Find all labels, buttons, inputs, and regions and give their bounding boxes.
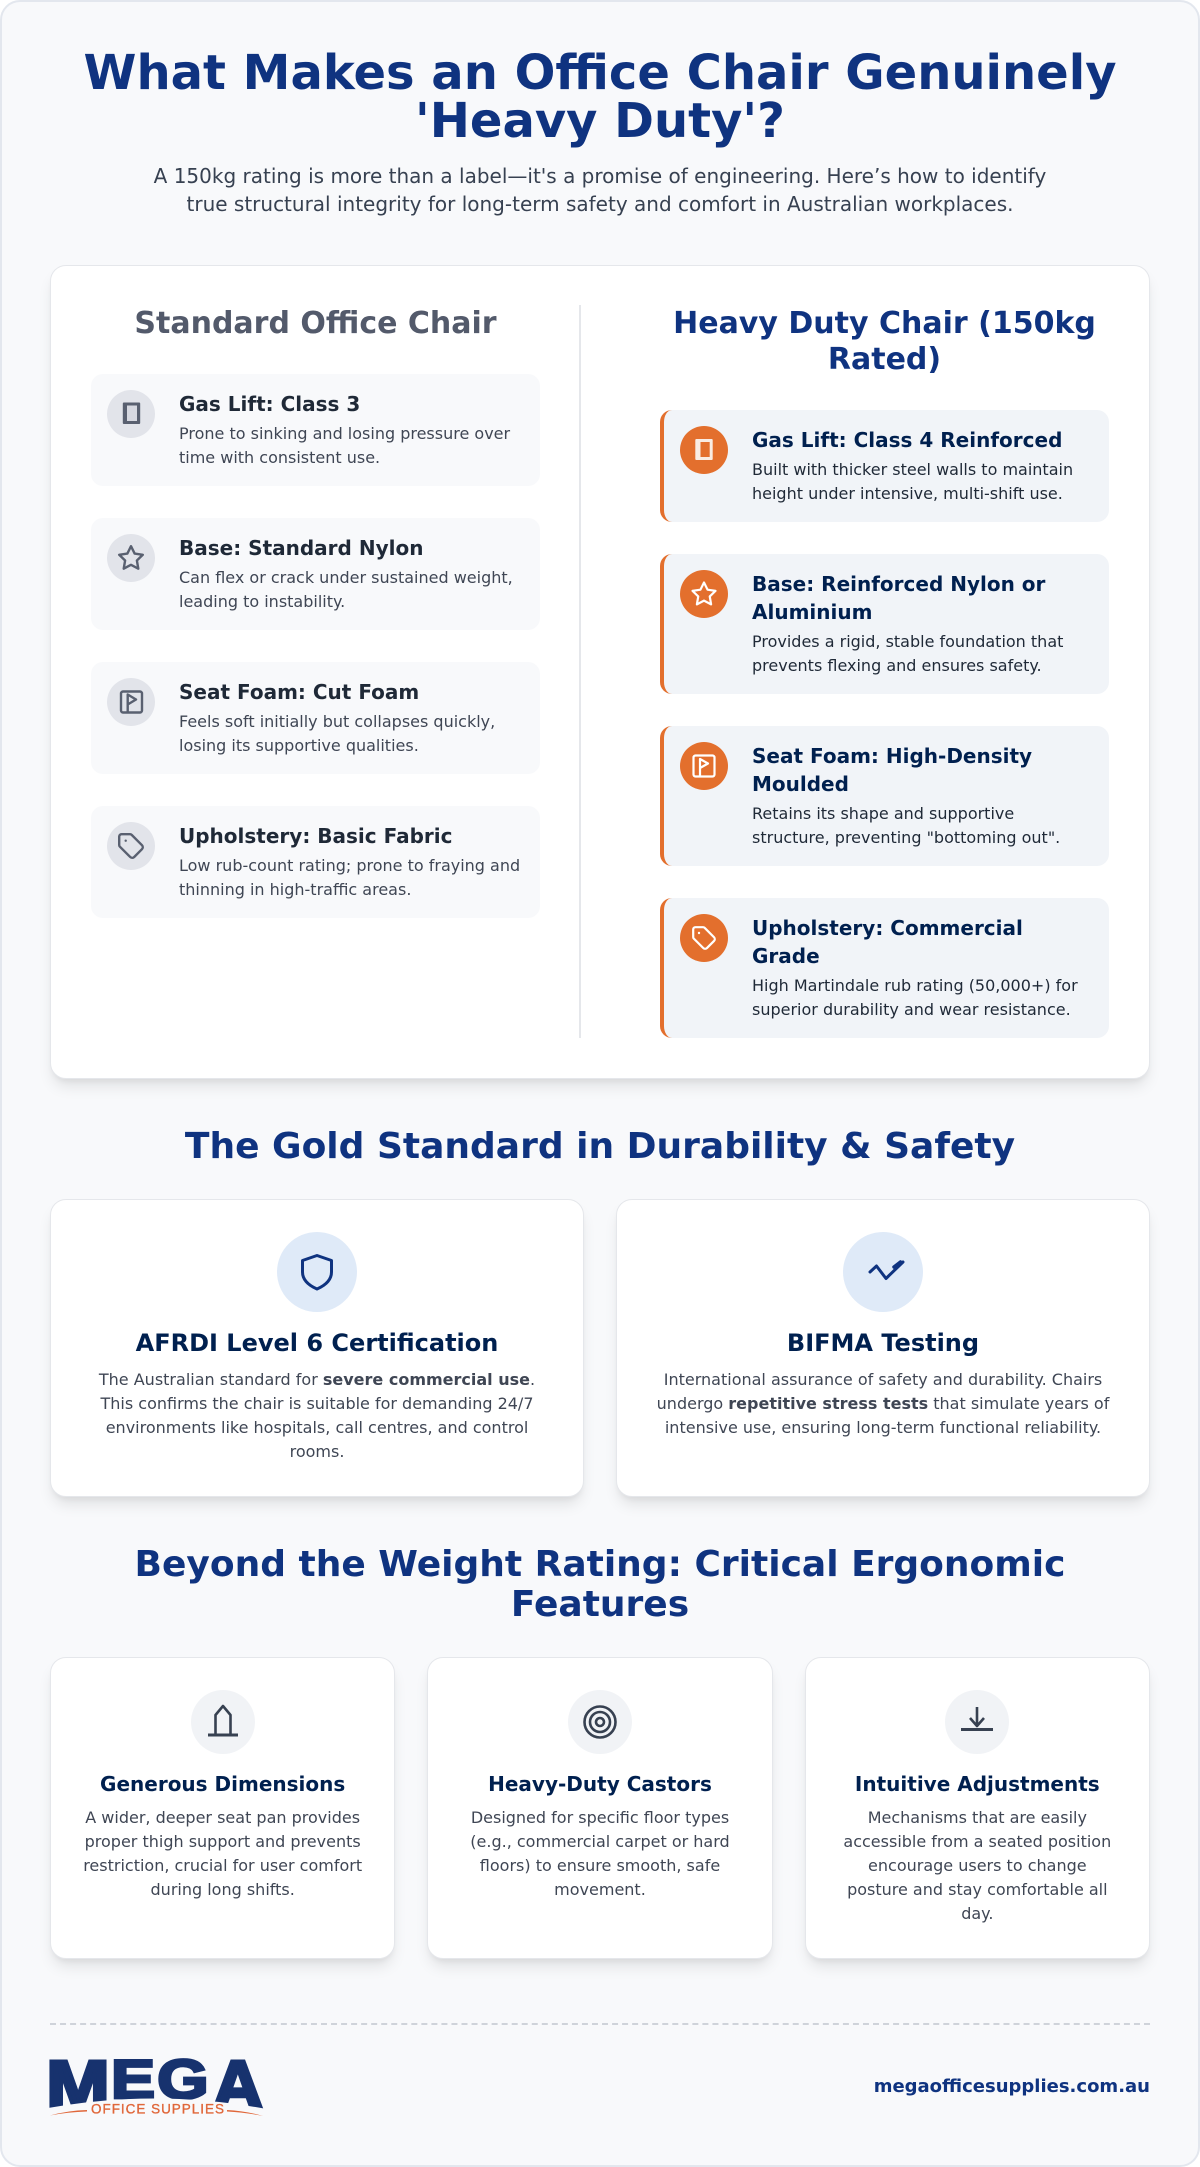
text: class 4 reinforced <box>752 428 1073 503</box>
icon: gas cylinder <box>680 426 728 474</box>
heading: dimensions: Generous Dimensions <box>100 1772 345 1796</box>
heavy duty item: base <box>660 554 1109 694</box>
heading: adjustments: Intuitive Adjustments <box>855 1772 1100 1796</box>
heading: heavy duty chair: Heavy Duty Chair (150kg <box>673 306 1096 341</box>
heading: heavy duty chair: Rated) <box>828 342 941 377</box>
text: adjustments description: accessible from a seated position <box>843 1832 1111 1851</box>
text: high-density moulded <box>752 744 1060 847</box>
icon: target <box>568 1690 632 1754</box>
text: high-density moulded: Moulded <box>752 772 849 796</box>
text: BIFMA description: intensive use, ensuring long-term functional reliability. <box>665 1418 1101 1437</box>
text: adjustments description: Mechanisms that are easily <box>868 1808 1087 1827</box>
text: reinforced nylon or aluminium: Aluminium <box>752 600 872 624</box>
text: dimensions description: during long shifts. <box>151 1880 295 1899</box>
panel: generous dimensions <box>50 1657 395 1959</box>
text: basic fabric: Low rub-count rating; prone to fraying and <box>179 856 520 875</box>
text: basic fabric <box>179 824 520 899</box>
panel: intuitive adjustments <box>805 1657 1150 1959</box>
heavy duty item: upholstery <box>660 898 1109 1038</box>
title <box>84 45 1116 149</box>
heading: standard office chair: Standard Office Chair <box>134 306 497 341</box>
text: adjustments description <box>843 1808 1111 1923</box>
text: adjustments description: day. <box>961 1904 993 1923</box>
website url: megaofficesupplies.com.au <box>874 2076 1150 2097</box>
text: adjustments description: posture and stay comfortable all <box>847 1880 1108 1899</box>
heading: heavy duty chair <box>673 306 1096 377</box>
text: gas lift class 3 <box>179 392 510 467</box>
subtitle text <box>154 164 1046 216</box>
text: dimensions description: proper thigh support and prevents <box>85 1832 361 1851</box>
subtitle text: true structural integrity for long-term safety and comfort in Australian workplaces. <box>186 192 1013 216</box>
heading: critical ergonomic features: Beyond the Weight Rating: Critical Ergonomic <box>135 1544 1065 1585</box>
icon: download arrow <box>945 1690 1009 1754</box>
text: gas lift class 3: Gas Lift: Class 3 <box>179 392 360 416</box>
text: AFRDI description: rooms. <box>290 1442 344 1461</box>
text: reinforced nylon or aluminium: Provides a rigid, stable foundation that <box>752 632 1063 651</box>
text: standard nylon <box>179 536 513 611</box>
text: class 4 reinforced: Built with thicker steel walls to maintain <box>752 460 1073 479</box>
logo: Mega Office Supplies <box>46 2046 264 2124</box>
text: castors description <box>470 1808 730 1899</box>
panel: heavy-duty castors <box>427 1657 773 1959</box>
text: BIFMA description: undergo repetitive stress tests that simulate years of <box>657 1394 1109 1413</box>
icon: star <box>107 534 155 582</box>
text: dimensions description: restriction, crucial for user comfort <box>83 1856 362 1875</box>
text: reinforced nylon or aluminium <box>752 572 1063 675</box>
text: commercial grade: High Martindale rub rating (50,000+) for <box>752 976 1078 995</box>
logo: Mega Office Supplies: G <box>157 2048 209 2111</box>
icon: star <box>680 570 728 618</box>
text: commercial grade <box>752 916 1078 1019</box>
text: high-density moulded: Retains its shape and supportive <box>752 804 1014 823</box>
text: high-density moulded: structure, preventing "bottoming out". <box>752 828 1060 847</box>
standard item: seat foam <box>91 662 540 774</box>
text: dimensions description: A wider, deeper seat pan provides <box>85 1808 360 1827</box>
text: castors description: floors) to ensure smooth, safe <box>480 1856 720 1875</box>
icon: tag <box>107 822 155 870</box>
panel: chair comparison <box>50 265 1150 1079</box>
standard item: upholstery <box>91 806 540 918</box>
text: commercial grade: Grade <box>752 944 820 968</box>
heading: castors: Heavy-Duty Castors <box>488 1772 712 1796</box>
text: castors description: movement. <box>554 1880 646 1899</box>
icon: shield <box>277 1232 357 1312</box>
text: cut foam: Seat Foam: Cut Foam <box>179 680 419 704</box>
text: gas lift class 3: time with consistent use. <box>179 448 380 467</box>
text: AFRDI description: The Australian standard for severe commercial use. <box>99 1370 535 1389</box>
text: AFRDI description: This confirms the chair is suitable for demanding 24/7 <box>100 1394 534 1413</box>
text: cut foam: losing its supportive qualities. <box>179 736 419 755</box>
subtitle text: A 150kg rating is more than a label—it's a promise of engineering. Here’s how to identify <box>154 164 1046 188</box>
icon: gas cylinder <box>107 390 155 438</box>
text: reinforced nylon or aluminium: Base: Reinforced Nylon or <box>752 572 1045 596</box>
text: castors description: (e.g., commercial carpet or hard <box>470 1832 730 1851</box>
logo: Mega Office Supplies: OFFICE SUPPLIES <box>91 2102 224 2116</box>
text: basic fabric: thinning in high-traffic areas. <box>179 880 411 899</box>
text: BIFMA description <box>657 1370 1110 1437</box>
footer dashed divider <box>50 2023 1150 2025</box>
text: commercial grade: superior durability and wear resistance. <box>752 1000 1071 1019</box>
text: reinforced nylon or aluminium: prevents flexing and ensures safety. <box>752 656 1042 675</box>
text: AFRDI description <box>98 1370 535 1461</box>
logo: Mega Office Supplies: M <box>46 2047 110 2124</box>
text: class 4 reinforced: Gas Lift: Class 4 Reinforced <box>752 428 1062 452</box>
icon: tower base <box>191 1690 255 1754</box>
panel: BIFMA testing <box>616 1199 1150 1497</box>
text: AFRDI description: environments like hospitals, call centres, and control <box>106 1418 528 1437</box>
panel: AFRDI certification <box>50 1199 584 1497</box>
text: standard nylon: leading to instability. <box>179 592 345 611</box>
logo: Mega Office Supplies: A <box>212 2046 263 2123</box>
standard item: base <box>91 518 540 630</box>
standard item: gas lift <box>91 374 540 486</box>
text: BIFMA description: International assurance of safety and durability. Chairs <box>664 1370 1102 1389</box>
heading: critical ergonomic features <box>135 1544 1065 1625</box>
icon: flag in square <box>680 742 728 790</box>
text: cut foam: Feels soft initially but collapses quickly, <box>179 712 495 731</box>
logo: Mega Office Supplies: E <box>111 2048 155 2110</box>
text: gas lift class 3: Prone to sinking and losing pressure over <box>179 424 510 443</box>
text: class 4 reinforced: height under intensive, multi-shift use. <box>752 484 1063 503</box>
heading: BIFMA: BIFMA Testing <box>787 1329 979 1357</box>
column divider <box>579 305 581 1038</box>
heading: gold standard: The Gold Standard in Durability & Safety <box>185 1126 1015 1167</box>
title: What Makes an Office Chair Genuinely <box>84 45 1116 101</box>
text: adjustments description: encourage users to change <box>868 1856 1087 1875</box>
text: castors description: Designed for specific floor types <box>471 1808 729 1827</box>
text: basic fabric: Upholstery: Basic Fabric <box>179 824 452 848</box>
text: standard nylon: Can flex or crack under sustained weight, <box>179 568 513 587</box>
heading: critical ergonomic features: Features <box>511 1584 689 1625</box>
title: 'Heavy Duty'? <box>415 93 785 149</box>
text: high-density moulded: Seat Foam: High-Density <box>752 744 1032 768</box>
icon: tag <box>680 914 728 962</box>
text: cut foam <box>179 680 495 755</box>
text: commercial grade: Upholstery: Commercial <box>752 916 1023 940</box>
heavy duty item: seat foam <box>660 726 1109 866</box>
icon: trend check <box>843 1232 923 1312</box>
icon: flag in square <box>107 678 155 726</box>
text: dimensions description <box>83 1808 362 1899</box>
heading: AFRDI Level 6: AFRDI Level 6 Certification <box>136 1329 498 1357</box>
heavy duty item: gas lift <box>660 410 1109 522</box>
text: standard nylon: Base: Standard Nylon <box>179 536 423 560</box>
